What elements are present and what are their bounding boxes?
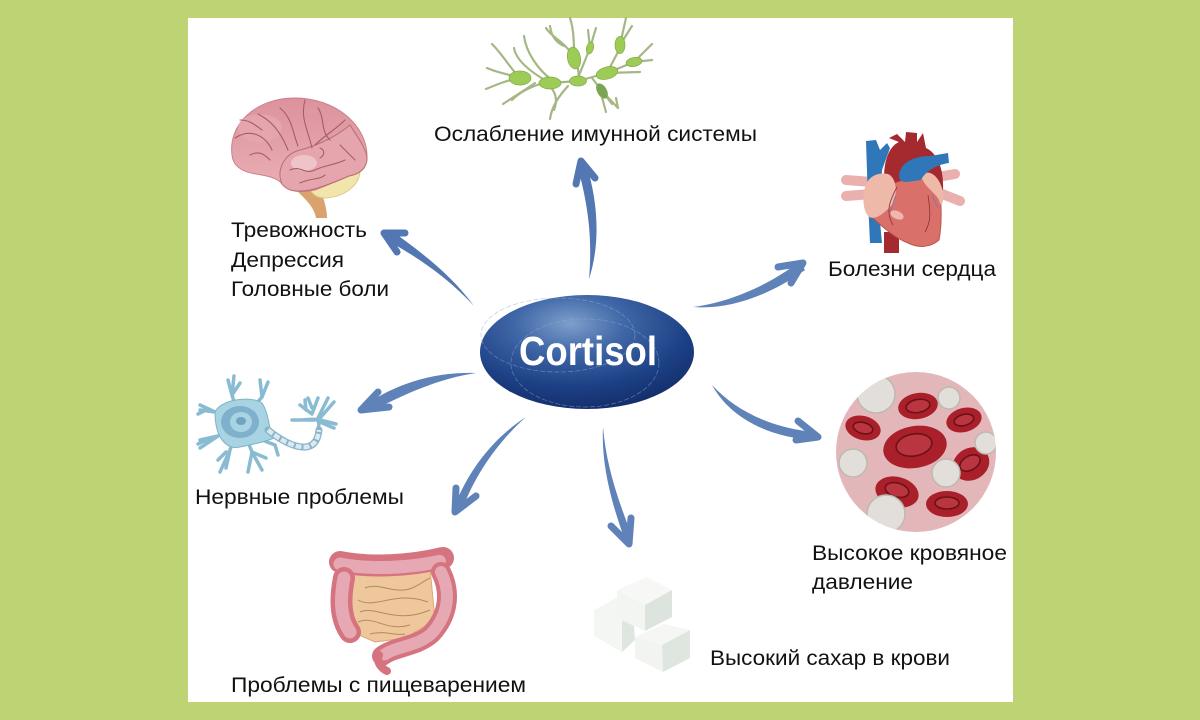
- label: anxiety, depression, headaches: Депрессия: [231, 249, 344, 272]
- icon: neuron: [198, 376, 336, 472]
- arrow: to digestion: [453, 417, 526, 512]
- central oval: Cortisol: [480, 295, 694, 409]
- white panel: [188, 18, 1013, 702]
- arrow: to nerves: [361, 373, 476, 411]
- arrow: to brain: [384, 231, 474, 306]
- label: high blood pressure: [812, 542, 1007, 594]
- label: high blood pressure: Высокое кровяное: [812, 542, 1007, 565]
- arrow: to blood: [712, 385, 818, 440]
- label: nerve problems: Нервные проблемы: [195, 486, 404, 509]
- icon: intestines: [340, 558, 447, 671]
- icon: brain: [232, 98, 367, 218]
- arrow: to heart: [693, 262, 805, 307]
- label: anxiety, depression, headaches: Тревожность: [231, 219, 367, 242]
- infographic canvas: [188, 17, 1013, 702]
- icon: heart: [846, 132, 960, 253]
- label: anxiety, depression, headaches: Головные боли: [231, 278, 389, 301]
- icon: sugar cubes: [594, 577, 690, 672]
- arrow: to sugar: [603, 427, 632, 544]
- label: anxiety, depression, headaches: [231, 219, 389, 301]
- label: heart disease: Болезни сердца: [828, 258, 996, 281]
- central oval: Cortisol: Cortisol: [519, 328, 657, 374]
- label: digestion problems: Проблемы с пищеварением: [231, 674, 526, 697]
- label: high blood sugar: Высокий сахар в крови: [710, 647, 950, 670]
- icon: blood cells: [836, 372, 997, 533]
- label: high blood pressure: давление: [812, 571, 913, 594]
- arrow: to immune system: [576, 161, 597, 279]
- label: weakened immunity: Ослабление имунной системы: [434, 123, 757, 146]
- icon: immune cell network: [486, 18, 652, 119]
